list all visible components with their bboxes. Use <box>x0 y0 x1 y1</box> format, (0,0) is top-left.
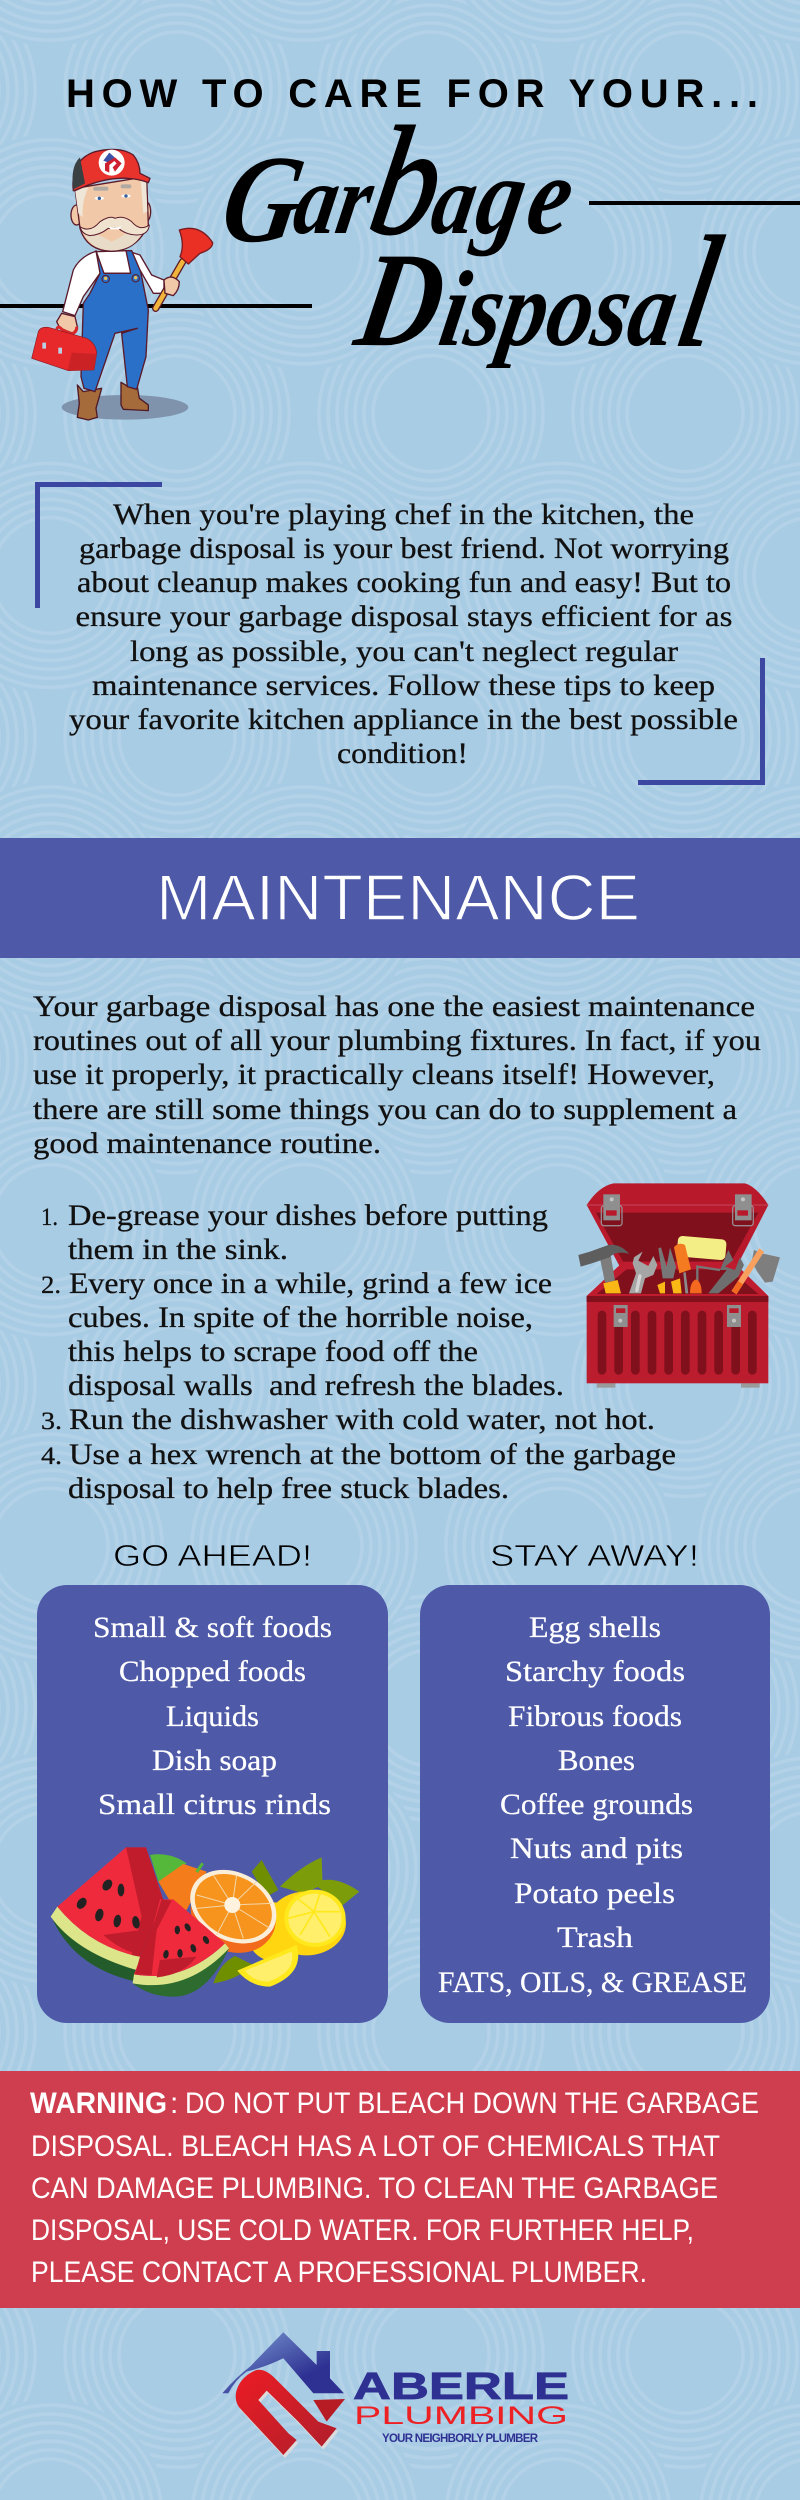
numbered tips list: cubes. In spite of the horrible noise, <box>68 1301 533 1334</box>
script title: e <box>519 134 583 258</box>
script title: s <box>457 249 514 368</box>
maintenance paragraph: Your garbage disposal has one the easiest maintenance <box>33 990 755 1023</box>
panel: go ahead foods: Liquids <box>166 1700 259 1733</box>
script title: p <box>485 249 559 368</box>
panel: warning <box>0 2071 800 2308</box>
panel: stay away foods: Fibrous foods <box>508 1700 682 1733</box>
panel: stay away foods: FATS, OILS, & GREASE <box>438 1966 747 1999</box>
script title: a <box>424 145 486 255</box>
heading: go ahead: GO AHEAD! <box>113 1538 312 1573</box>
intro bracket top left <box>35 482 162 608</box>
panel: stay away foods: Coffee grounds <box>500 1788 693 1821</box>
script title: a <box>286 145 348 255</box>
logo: aberle plumbing: ABERLE <box>353 2366 569 2408</box>
script title: G <box>213 131 314 269</box>
panel: go ahead foods: Small citrus rinds <box>98 1788 331 1821</box>
panel: warning: : <box>170 2087 178 2120</box>
heading: stay away: STAY AWAY! <box>490 1538 699 1573</box>
script title: l <box>665 205 734 380</box>
icon: plumber mascot <box>32 149 213 420</box>
panel: go ahead foods: Dish soap <box>152 1744 277 1777</box>
panel: stay away foods: Trash <box>557 1921 633 1954</box>
numbered tips list: them in the sink. <box>68 1233 288 1266</box>
numbered tips list: this helps to scrape food off the <box>68 1335 478 1368</box>
icon: fruit illustration <box>51 1847 359 1997</box>
panel: stay away foods: Nuts and pits <box>510 1832 683 1865</box>
logo: aberle plumbing: PLUMBING <box>354 2402 568 2430</box>
script title: s <box>583 249 641 368</box>
panel: stay away foods: Bones <box>558 1744 635 1777</box>
icon: red toolbox with tools <box>578 1183 780 1388</box>
maintenance paragraph: there are still some things you can do to supplement a <box>33 1093 737 1126</box>
panel: warning: CAN DAMAGE PLUMBING. TO CLEAN THE GARBAGE <box>31 2172 718 2205</box>
maintenance paragraph: routines out of all your plumbing fixtures. In fact, if you <box>33 1024 761 1057</box>
numbered tips list: De-grease your dishes before putting <box>68 1199 548 1232</box>
intro text block <box>69 498 738 770</box>
panel: go ahead foods: Small & soft foods <box>93 1611 332 1644</box>
panel: warning: DISPOSAL. BLEACH HAS A LOT OF CHEMICALS THAT <box>31 2130 720 2163</box>
maintenance paragraph: use it properly, it practically cleans itself! However, <box>33 1058 715 1091</box>
numbered tips list: disposal walls and refresh the blades. <box>68 1369 564 1402</box>
panel: warning: PLEASE CONTACT A PROFESSIONAL PLUMBER. <box>31 2256 647 2289</box>
script title: r <box>329 145 383 255</box>
panel: warning: WARNING <box>30 2087 167 2120</box>
intro text block: maintenance services. Follow these tips to keep <box>92 669 715 702</box>
intro text block: ensure your garbage disposal stays efficient for as <box>76 600 732 633</box>
script title <box>213 96 734 380</box>
logo: aberle plumbing: YOUR NEIGHBORLY PLUMBER <box>382 2433 539 2445</box>
script title: o <box>538 249 605 368</box>
script title: i <box>432 249 479 368</box>
heading: how to care for your: HOW TO CARE FOR YOUR... <box>66 72 758 116</box>
panel: go ahead foods <box>37 1585 388 2023</box>
divider line left of title <box>0 304 312 308</box>
numbered tips list: Run the dishwasher with cold water, not hot. <box>69 1403 655 1436</box>
maintenance paragraph <box>33 990 761 1160</box>
intro text block: condition! <box>337 737 468 770</box>
script title: D <box>346 225 456 375</box>
numbered tips list: 1. <box>41 1204 58 1231</box>
script title: a <box>620 249 687 368</box>
numbered tips list: 4. <box>41 1443 62 1470</box>
panel: stay away foods: Egg shells <box>529 1611 661 1644</box>
intro text block: garbage disposal is your best friend. Not worrying <box>79 532 729 565</box>
intro bracket bottom right <box>638 658 765 785</box>
banner: maintenance <box>0 838 800 958</box>
panel: stay away foods <box>420 1585 770 2023</box>
maintenance paragraph: good maintenance routine. <box>33 1127 381 1160</box>
intro text block: about cleanup makes cooking fun and easy! But to <box>77 566 731 599</box>
numbered tips list: Use a hex wrench at the bottom of the garbage <box>69 1438 676 1471</box>
numbered tips list: disposal to help free stuck blades. <box>68 1472 509 1505</box>
banner: maintenance: MAINTENANCE <box>156 861 640 934</box>
intro text block: your favorite kitchen appliance in the best possible <box>69 703 738 736</box>
script title: b <box>359 96 455 267</box>
panel: warning: DISPOSAL, USE COLD WATER. FOR FURTHER HELP, <box>31 2214 694 2247</box>
numbered tips list <box>41 1199 676 1505</box>
numbered tips list: Every once in a while, grind a few ice <box>69 1267 552 1300</box>
panel: stay away foods: Starchy foods <box>505 1655 685 1688</box>
numbered tips list: 2. <box>41 1272 61 1299</box>
logo: aberle plumbing <box>222 2332 569 2458</box>
divider line right of title <box>589 201 800 205</box>
intro text block: When you're playing chef in the kitchen, the <box>113 498 694 531</box>
script title: g <box>466 136 536 258</box>
intro text block: long as possible, you can't neglect regular <box>130 635 678 668</box>
panel: stay away foods: Potato peels <box>514 1877 675 1910</box>
numbered tips list: 3. <box>41 1408 62 1435</box>
panel: go ahead foods: Chopped foods <box>119 1655 306 1688</box>
